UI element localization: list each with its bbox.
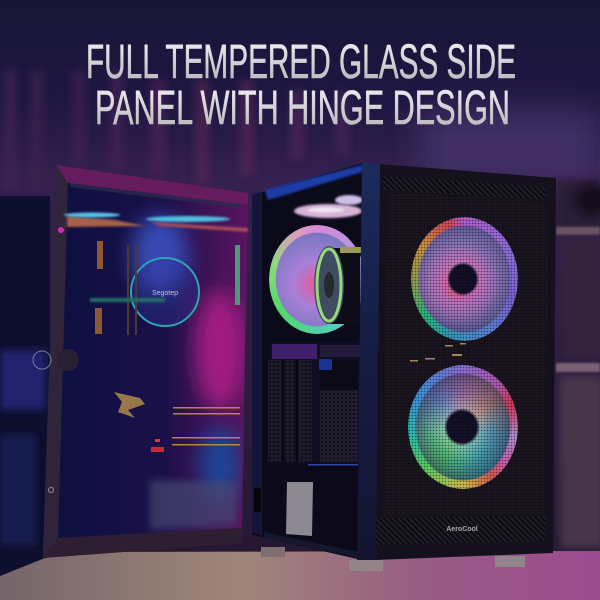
case interior (252, 163, 362, 560)
front bottom fan hub (444, 408, 480, 446)
feet (261, 547, 525, 571)
front top fan disc (415, 222, 513, 334)
dark monitor behind door (0, 196, 50, 576)
side fan ring (269, 225, 365, 334)
door screws and handle (33, 227, 79, 492)
speckle light between fans (410, 343, 466, 362)
door CPU cooler reflection ring (131, 258, 199, 326)
front top fan ring (411, 217, 518, 341)
logo: AeroCool (446, 526, 478, 533)
door CPU cooler reflection ring: Segotep (152, 290, 178, 297)
side fan glow (273, 229, 361, 329)
door top fan reflection (67, 216, 145, 227)
front top fan hub (447, 262, 479, 296)
door reflected components (90, 241, 240, 452)
title (86, 36, 516, 135)
case front body (376, 164, 556, 560)
top interior fans (294, 195, 363, 218)
front bottom fan ring (408, 365, 518, 489)
case pillar (357, 163, 380, 560)
front bottom fan disc (412, 370, 512, 484)
table top (0, 551, 600, 600)
glass side door (33, 165, 248, 558)
